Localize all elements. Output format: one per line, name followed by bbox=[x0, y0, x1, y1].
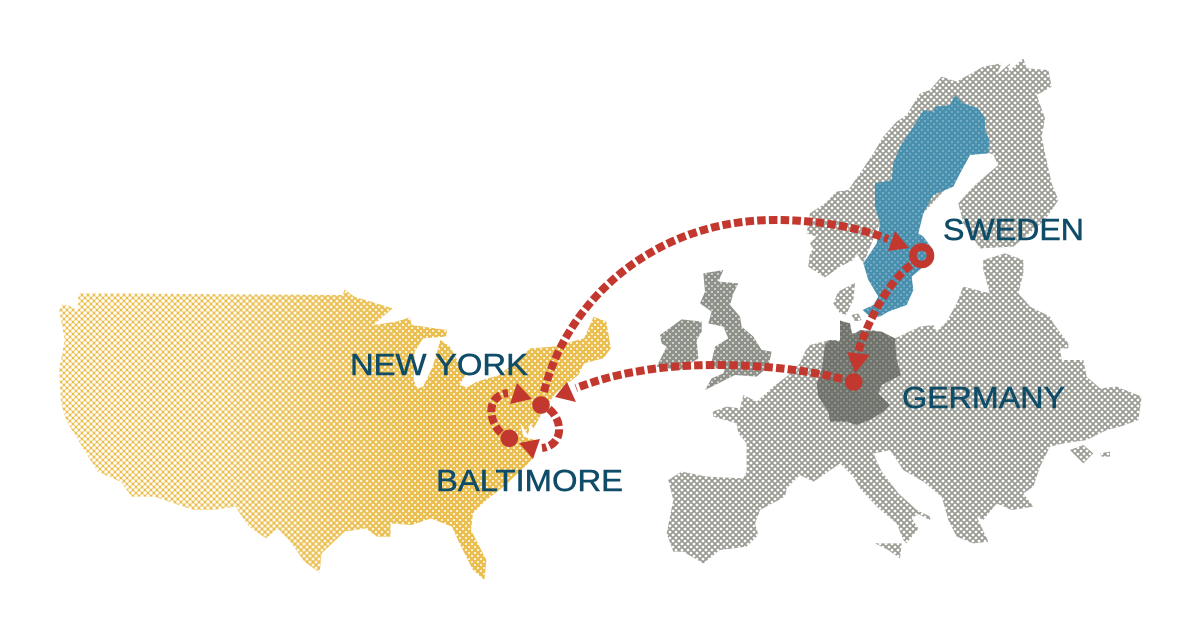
label: Sweden: SWEDEN bbox=[943, 213, 1084, 247]
arrow: New York to Sweden bbox=[544, 220, 909, 392]
marker: Sweden origin ring bbox=[913, 247, 930, 264]
label: Germany: GERMANY bbox=[902, 381, 1065, 415]
map: continental Europe bbox=[667, 253, 1142, 563]
label: New York: NEW YORK bbox=[350, 348, 528, 382]
map: Ireland bbox=[657, 319, 702, 370]
arrow: Sweden to Germany bbox=[847, 265, 911, 373]
map: Germany highlighted bbox=[817, 321, 901, 425]
map: United States bbox=[59, 289, 611, 580]
map: Norway and Finland bbox=[807, 58, 1058, 277]
map: Denmark bbox=[833, 283, 862, 322]
arrow: New York to Baltimore bbox=[519, 409, 559, 459]
arrow: Germany to New York bbox=[555, 365, 842, 402]
marker: Germany bbox=[845, 373, 862, 391]
map: Sweden highlighted bbox=[863, 95, 989, 317]
label: Baltimore: BALTIMORE bbox=[436, 464, 623, 498]
arrow: Baltimore to New York bbox=[491, 383, 532, 433]
marker: Baltimore bbox=[500, 430, 518, 447]
map: Great Britain bbox=[700, 270, 772, 390]
marker: New York bbox=[532, 396, 550, 414]
